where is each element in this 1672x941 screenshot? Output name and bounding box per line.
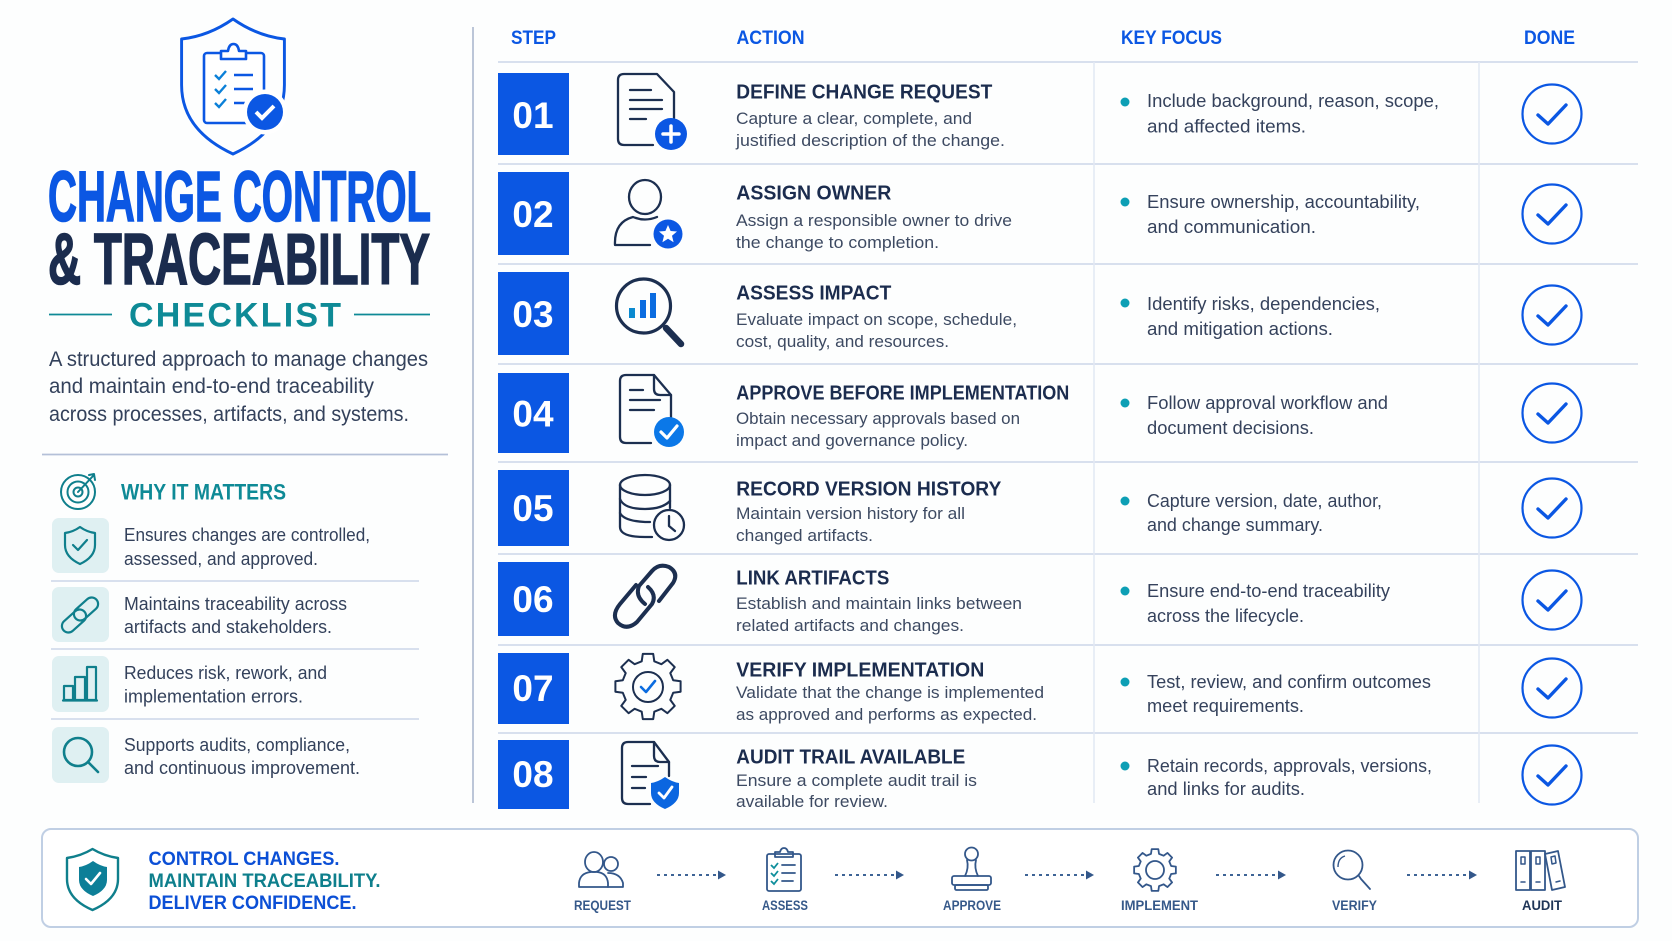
row 02: Assign a responsible owner to drive [736,211,1012,230]
flow: audit: AUDIT [1522,898,1563,913]
row 01: and affected items. [1147,116,1306,136]
panel: bottom banner [42,829,1638,927]
row 01: Capture a clear, complete, and [736,109,972,128]
row 07: Validate that the change is implemented [736,683,1044,702]
row 07: 07 [512,668,554,709]
title: traceability: & TRACEABILITY [48,219,430,300]
icon: chain link [615,566,675,627]
flow: audit [1516,851,1565,913]
row 06: LINK ARTIFACTS [736,568,889,590]
item: audits: and continuous improvement. [124,758,360,778]
item: audits: Supports audits, compliance, [124,735,350,755]
row 03: and mitigation actions. [1147,319,1333,339]
row 07 [498,653,1582,724]
icon: magnifier with bars [616,279,681,344]
row 03: Evaluate impact on scope, schedule, [736,310,1017,329]
row 02: Ensure ownership, accountability, [1147,192,1420,212]
flow: assess [762,848,808,913]
icon: database clock [620,475,684,540]
table header: ACTION [736,28,804,49]
row 03: cost, quality, and resources. [736,332,949,351]
row 05: and change summary. [1147,515,1323,535]
item: controlled [52,518,370,573]
row 08: Retain records, approvals, versions, [1147,756,1432,776]
row 08: 08 [512,754,554,795]
row 04: Obtain necessary approvals based on [736,409,1020,428]
row 08: AUDIT TRAIL AVAILABLE [736,747,965,769]
row 08: and links for audits. [1147,779,1305,799]
row 04: Follow approval workflow and [1147,393,1388,413]
row 03: 03 [512,294,554,335]
row 06: 06 [512,579,554,620]
panel: checklist table [498,28,1638,811]
row 05: 05 [512,488,554,529]
row 04: APPROVE BEFORE IMPLEMENTATION [736,383,1069,405]
icon: person with star [615,180,682,248]
row 05: Capture version, date, author, [1147,491,1382,511]
row 04: 04 [512,394,554,434]
panel: why it matters [51,474,419,783]
table header: STEP [511,28,556,49]
item: controlled: assessed, and approved. [124,549,318,569]
flow: approve [943,848,1001,913]
icon: teal shield [67,849,118,910]
slogan: DELIVER CONFIDENCE. [148,893,356,914]
row 06: Ensure end-to-end traceability [1147,581,1390,601]
row 02: the change to completion. [736,233,939,252]
row 05: Maintain version history for all [736,504,965,523]
row 01: DEFINE CHANGE REQUEST [736,82,992,104]
intro paragraph: across processes, artifacts, and systems. [49,403,409,426]
row 08 [498,740,1582,811]
row 03: ASSESS IMPACT [736,283,891,305]
row 04: document decisions. [1147,418,1314,438]
intro paragraph: A structured approach to manage changes [49,348,428,371]
arrow [1025,870,1094,880]
flow: approve: APPROVE [943,898,1001,913]
icon: document plus [618,74,687,150]
row 05: RECORD VERSION HISTORY [736,479,1002,501]
flow: assess: ASSESS [762,898,808,913]
row 04: impact and governance policy. [736,431,968,450]
row 08: available for review. [736,792,888,811]
table header [511,28,1575,49]
icon: target [61,474,95,509]
flow: request: REQUEST [574,898,632,913]
arrow [1216,870,1286,880]
arrow [1407,870,1477,880]
row 01: justified description of the change. [735,131,1005,150]
row 02: ASSIGN OWNER [736,183,892,205]
row 06: related artifacts and changes. [736,616,964,635]
intro paragraph [49,348,428,426]
item: traceability [52,587,347,642]
item: risk: implementation errors. [124,686,303,706]
row 05: changed artifacts. [736,526,873,545]
row 02 [498,172,1582,255]
row 07: meet requirements. [1147,696,1304,716]
row 07: as approved and performs as expected. [736,705,1037,724]
row 02: 02 [512,194,554,235]
table header: KEY FOCUS [1121,28,1222,49]
row 01: 01 [512,95,554,136]
flow: verify: VERIFY [1332,898,1377,913]
row 03: Identify risks, dependencies, [1147,294,1380,314]
row 02: and communication. [1147,217,1316,237]
flow: request [574,852,632,913]
row 08: Ensure a complete audit trail is [736,771,977,790]
table header: DONE [1524,28,1575,49]
row 06: Establish and maintain links between [736,594,1022,613]
row 01: Include background, reason, scope, [1147,91,1439,111]
title: change control: CHANGE CONTROL [48,158,431,237]
icon: shield with clipboard [182,19,288,154]
item: risk [52,656,327,712]
arrow [657,870,726,880]
item: audits [52,727,360,783]
row 07: Test, review, and confirm outcomes [1147,672,1431,692]
item: traceability: Maintains traceability across [124,594,347,614]
flow: implement [1121,849,1199,913]
slogan: CONTROL CHANGES. [148,849,340,870]
icon: document check [620,375,684,447]
flow: verify [1332,850,1377,913]
flow: implement: IMPLEMENT [1121,898,1199,913]
slogan: MAINTAIN TRACEABILITY. [148,871,380,892]
item: controlled: Ensures changes are controlled, [124,525,370,545]
intro paragraph: and maintain end-to-end traceability [49,375,374,398]
arrow [835,870,904,880]
panel: title and intro [48,19,431,426]
subtitle: checklist: CHECKLIST [129,296,341,334]
row 06: across the lifecycle. [1147,606,1304,626]
row 05 [498,470,1582,546]
row 06 [498,562,1582,636]
slogan [148,849,380,914]
row 01 [498,73,1582,155]
row 03 [498,272,1582,355]
heading: why it matters: WHY IT MATTERS [121,480,286,504]
icon: gear check [615,654,681,719]
row 04 [498,373,1582,453]
row 07: VERIFY IMPLEMENTATION [736,660,984,682]
item: risk: Reduces risk, rework, and [124,663,327,683]
icon: document shield [622,742,679,809]
item: traceability: artifacts and stakeholders. [124,617,332,637]
